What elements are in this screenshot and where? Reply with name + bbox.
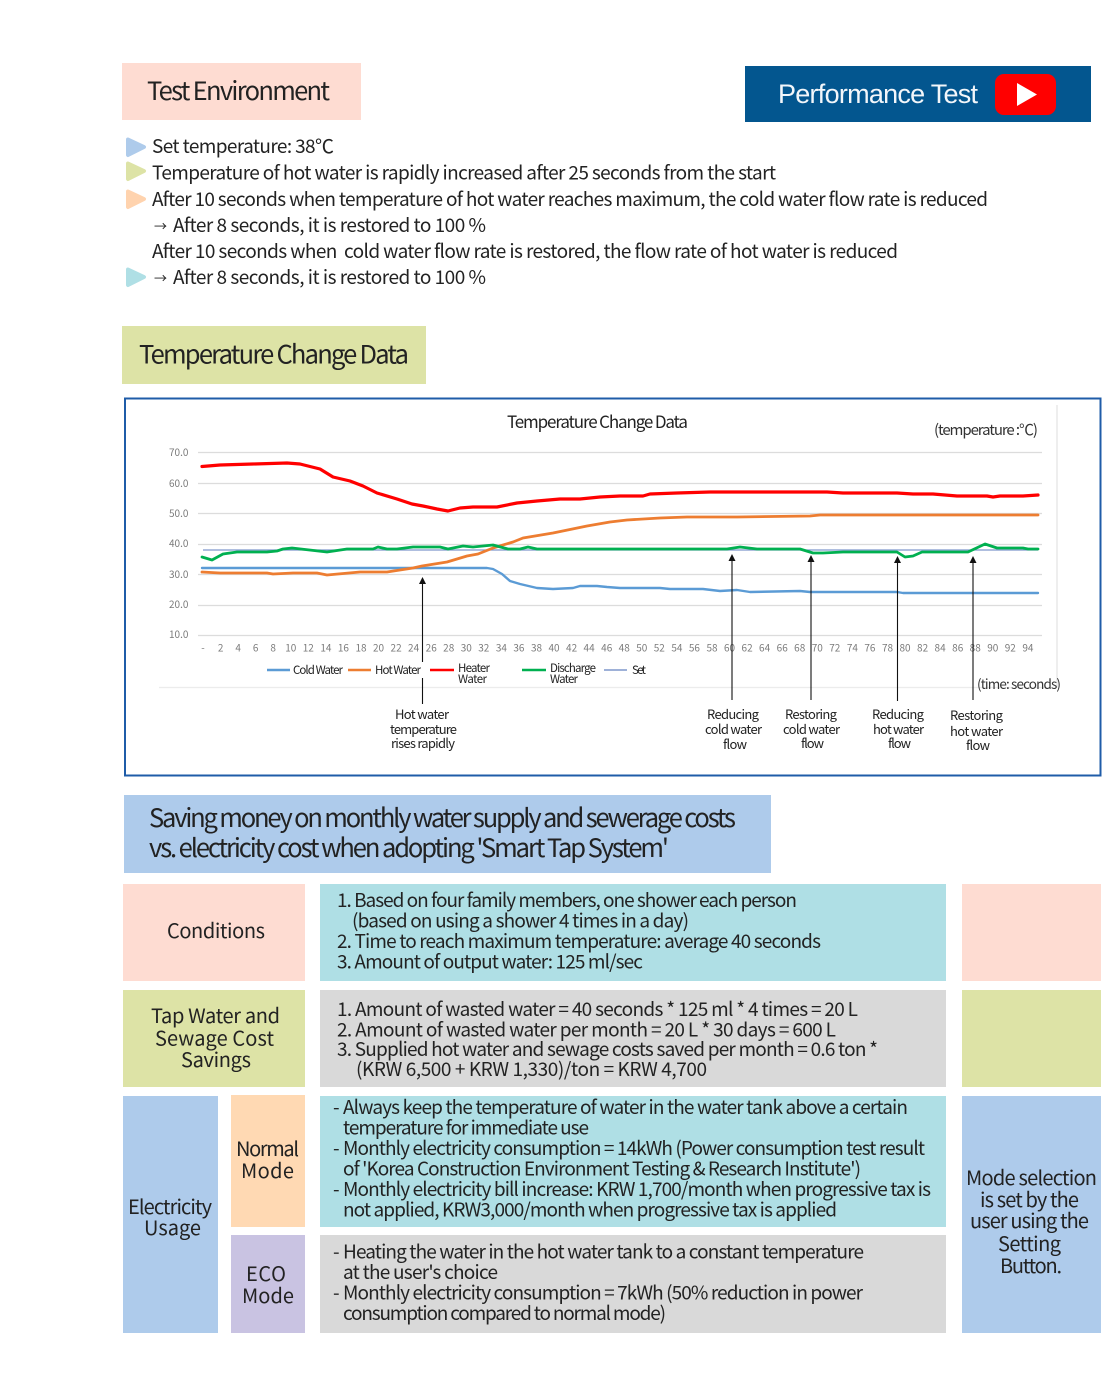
x axis labels: 26: [426, 640, 437, 654]
panel: tap water and sewage cost savings label: Savings: [181, 1044, 251, 1073]
panel: savings side block: [962, 990, 1101, 1087]
x axis labels: 14: [320, 640, 332, 654]
panel: eco mode details: [320, 1235, 946, 1333]
panel: normal mode details: Always keep the temperature of water in the water tank above a certain: [343, 1093, 908, 1120]
callout: hot water temperature rises rapidly: rises rapidly: [391, 733, 455, 752]
arrow: reducing cold water flow: [728, 554, 736, 700]
legend: Heater: [458, 660, 491, 676]
panel: mode selection note: [962, 1096, 1101, 1333]
chart title: Temperature Change Data: [507, 408, 688, 433]
series: set temperature: [203, 549, 1038, 551]
callout: reducing hot water flow: hot water: [873, 719, 925, 738]
bullet text lines: Set temperature: 38℃: [152, 132, 334, 159]
panel: eco mode details: Monthly electricity consumption = 7kWh (50% reduction in power: [343, 1278, 864, 1306]
bullet text lines: After 8 seconds, it is restored to 100 %: [173, 263, 486, 290]
icon: orange bullet: [128, 192, 144, 207]
x axis labels: 18: [355, 640, 367, 654]
panel: normal mode label: Normal: [236, 1133, 299, 1162]
panel: tap water and sewage cost savings label: Tap Water and: [151, 1000, 280, 1029]
unit label: time: (time: seconds): [977, 673, 1061, 693]
y axis labels: 60.0: [169, 475, 189, 490]
y axis labels: 20.0: [169, 596, 189, 611]
panel: conditions details: [320, 884, 946, 981]
panel: mode selection note: is set by the: [980, 1184, 1079, 1213]
x axis labels: 78: [882, 640, 893, 654]
x axis labels: 72: [829, 640, 841, 654]
x axis labels: 84: [935, 640, 946, 654]
x axis labels: 12: [303, 640, 314, 654]
panel: normal mode details: -: [333, 1175, 340, 1202]
heading: Test Environment: Test Environment: [147, 71, 330, 108]
panel: normal mode details: Monthly electricity bill increase: KRW 1,700/month when progressive tax is: [343, 1175, 931, 1202]
arrow: restoring hot water flow: [970, 556, 976, 700]
panel: savings calculation: 3. Supplied hot water and sewage costs saved per month = 0.6 ton *: [337, 1035, 878, 1062]
legend: Water: [550, 671, 579, 687]
x axis labels: 6: [253, 640, 259, 654]
panel: conditions side block: [962, 884, 1101, 981]
x axis labels: 4: [235, 640, 241, 654]
panel: savings calculation: (KRW 6,500 + KRW 1,330)/ton = KRW 4,700: [356, 1055, 707, 1082]
bullet text lines: →: [154, 216, 167, 235]
x axis labels: 20: [373, 640, 384, 654]
panel: savings calculation: 1. Amount of wasted water = 40 seconds * 125 ml * 4 times = 20 L: [337, 995, 858, 1022]
panel: eco mode details: consumption compared to normal mode): [343, 1299, 666, 1326]
callout: hot water temperature rises rapidly: temperature: [390, 719, 457, 738]
callout: restoring cold water flow: Restoring: [785, 704, 838, 723]
x axis labels: 82: [917, 640, 929, 654]
legend: Discharge: [550, 660, 596, 676]
heading: Test Environment: [122, 63, 361, 120]
panel: eco mode label: [231, 1235, 305, 1333]
panel: normal mode details: Monthly electricity consumption = 14kWh (Power consumption test result: [343, 1134, 925, 1161]
x axis labels: 54: [671, 640, 683, 654]
y axis labels: [169, 444, 189, 641]
legend: Cold Water: [293, 662, 344, 678]
callout: hot water temperature rises rapidly: Hot water: [395, 704, 450, 723]
x axis labels: 32: [478, 640, 490, 654]
y axis labels: 70.0: [169, 444, 189, 459]
y axis labels: 10.0: [169, 626, 189, 641]
x axis labels: 60: [724, 640, 735, 654]
callout: restoring hot water flow: hot water: [950, 721, 1004, 740]
x axis labels: 34: [496, 640, 507, 654]
x axis labels: 48: [619, 640, 630, 654]
heading: Temperature Change Data: [122, 326, 426, 384]
bullet text lines: After 10 seconds when temperature of hot water reaches maximum, the cold water flow rate is reduced: [152, 185, 988, 212]
bullet text lines: [152, 132, 988, 290]
x axis labels: 40: [548, 640, 560, 654]
callout: reducing cold water flow: Reducing: [707, 704, 760, 723]
panel: conditions label: [123, 884, 305, 981]
callout: restoring cold water flow: flow: [801, 733, 825, 752]
panel: mode selection note: Setting: [998, 1228, 1061, 1257]
x axis labels: 44: [584, 640, 595, 654]
x axis labels: 66: [777, 640, 788, 654]
x axis labels: 74: [847, 640, 858, 654]
panel: normal mode details: not applied, KRW3,000/month when progressive tax is applied: [343, 1196, 837, 1222]
series: discharge water: [202, 544, 1038, 560]
y axis labels: 40.0: [169, 535, 189, 550]
y axis labels: 50.0: [169, 505, 189, 520]
x axis labels: 30: [461, 640, 472, 654]
panel: eco mode details: Heating the water in the hot water tank to a constant temperature: [343, 1238, 864, 1264]
callout: reducing hot water flow: flow: [888, 733, 912, 752]
x axis labels: 70: [812, 640, 823, 654]
legend: Hot Water: [375, 662, 422, 678]
panel: normal mode details: temperature for immediate use: [343, 1114, 589, 1140]
panel: normal mode details: -: [333, 1134, 340, 1161]
x axis labels: 76: [864, 640, 876, 654]
panel: temperature line chart: [125, 398, 1100, 776]
button: Performance Test video link: [745, 66, 1091, 122]
panel: conditions details: 2. Time to reach maximum temperature: average 40 seconds: [337, 927, 821, 954]
x axis labels: 52: [654, 640, 665, 654]
y axis labels: 30.0: [169, 566, 189, 581]
heading: saving money comparison: vs. electricity cost when adopting 'Smart Tap System': [149, 828, 669, 865]
x axis labels: 46: [601, 640, 613, 654]
panel: mode selection note: user using the: [970, 1205, 1089, 1234]
series: hot water: [202, 515, 1038, 575]
panel: eco mode details: -: [333, 1278, 340, 1306]
panel: normal mode details: of 'Korea Construction Environment Testing & Research Institute'): [343, 1154, 861, 1182]
panel: eco mode label: ECO: [246, 1258, 286, 1287]
panel: tap water and sewage cost savings label: [123, 990, 305, 1087]
panel: mode selection note: Mode selection: [966, 1162, 1097, 1191]
panel: normal mode label: [231, 1095, 305, 1227]
arrow: restoring cold water flow: [808, 555, 814, 700]
panel: conditions details: 3. Amount of output water: 125 ml/sec: [337, 948, 643, 974]
callout: restoring cold water flow: [783, 704, 841, 752]
panel: eco mode details: -: [333, 1238, 340, 1264]
x axis labels: 62: [742, 640, 753, 654]
x axis labels: 16: [338, 640, 349, 654]
heading: saving money comparison: [124, 795, 771, 873]
callout: reducing hot water flow: [872, 704, 925, 752]
icon: green bullet: [128, 164, 144, 179]
panel: normal mode details: [320, 1093, 946, 1227]
panel: electricity usage label: [123, 1096, 218, 1333]
x axis labels: 36: [513, 640, 525, 654]
callout: reducing cold water flow: flow: [723, 734, 748, 753]
bullet text lines: →: [154, 268, 167, 287]
x axis labels: 38: [531, 640, 542, 654]
text block: test environment bullets: [128, 132, 988, 290]
x axis labels: 94: [1022, 640, 1034, 654]
heading: saving money comparison: Saving money on monthly water supply and sewerage costs: [149, 798, 736, 835]
series: cold water: [202, 568, 1038, 593]
icon: play button: [995, 74, 1056, 115]
panel: eco mode details: at the user's choice: [343, 1258, 498, 1285]
legend: Set: [632, 662, 647, 678]
bullet text lines: After 8 seconds, it is restored to 100 %: [173, 211, 486, 238]
panel: conditions details: 1. Based on four family members, one shower each person: [337, 886, 797, 913]
x axis labels: 8: [270, 640, 276, 654]
panel: electricity usage label: Usage: [144, 1212, 201, 1241]
unit label: temperature: (temperature :℃): [934, 419, 1038, 440]
panel: normal mode label: Mode: [241, 1155, 294, 1184]
x axis labels: 10: [285, 640, 297, 654]
legend: [267, 660, 647, 687]
callout: restoring hot water flow: Restoring: [950, 705, 1004, 724]
bullet text lines: After 10 seconds when cold water flow rate is restored, the flow rate of hot water is reduced: [152, 237, 898, 264]
panel: savings calculation: 2. Amount of wasted water per month = 20 L * 30 days = 600 L: [337, 1016, 836, 1042]
panel: tap water and sewage cost savings label: Sewage Cost: [155, 1022, 274, 1052]
x axis labels: 42: [566, 640, 578, 654]
arrow: reducing hot water flow: [894, 556, 901, 701]
x axis labels: [201, 640, 1034, 654]
callout: hot water temperature rises rapidly: [390, 704, 457, 752]
icon: blue bullet: [128, 140, 144, 155]
x axis labels: -: [201, 640, 205, 654]
x axis labels: 56: [689, 640, 700, 654]
x axis labels: 90: [987, 640, 999, 654]
x axis labels: 80: [899, 640, 911, 654]
panel: normal mode details: -: [333, 1093, 340, 1120]
heading: Temperature Change Data: Temperature Change Data: [139, 334, 409, 372]
callout: reducing cold water flow: [705, 704, 763, 753]
x axis labels: 68: [794, 640, 806, 654]
panel: electricity usage label: Electricity: [128, 1191, 213, 1220]
x axis labels: 22: [391, 640, 402, 654]
icon: teal bullet: [128, 270, 144, 285]
x axis labels: 88: [970, 640, 981, 654]
panel: eco mode label: Mode: [242, 1280, 294, 1309]
bullet text lines: Temperature of hot water is rapidly increased after 25 seconds from the start: [152, 158, 776, 186]
callout: restoring hot water flow: [950, 705, 1004, 754]
x axis labels: 2: [218, 640, 224, 654]
panel: conditions details: (based on using a shower 4 times in a day): [352, 906, 689, 934]
x axis labels: 24: [408, 640, 420, 654]
callout: restoring cold water flow: cold water: [783, 719, 841, 738]
legend: Water: [458, 671, 488, 687]
x axis labels: 86: [952, 640, 964, 654]
panel: conditions label: Conditions: [167, 915, 265, 944]
x axis labels: 64: [759, 640, 771, 654]
x axis labels: 58: [706, 640, 718, 654]
panel: mode selection note: Button.: [1000, 1250, 1062, 1279]
x axis labels: 50: [636, 640, 648, 654]
callout: restoring hot water flow: flow: [966, 735, 991, 754]
series: heater water: [202, 463, 1038, 511]
button: Performance Test video link: Performance Test: [778, 79, 978, 109]
arrow: hot water temperature rises rapidly: [419, 577, 426, 704]
x axis labels: 92: [1005, 640, 1016, 654]
callout: reducing cold water flow: cold water: [705, 719, 763, 738]
callout: reducing hot water flow: Reducing: [872, 704, 925, 723]
x axis labels: 28: [443, 640, 455, 654]
panel: savings calculation: [320, 990, 946, 1087]
